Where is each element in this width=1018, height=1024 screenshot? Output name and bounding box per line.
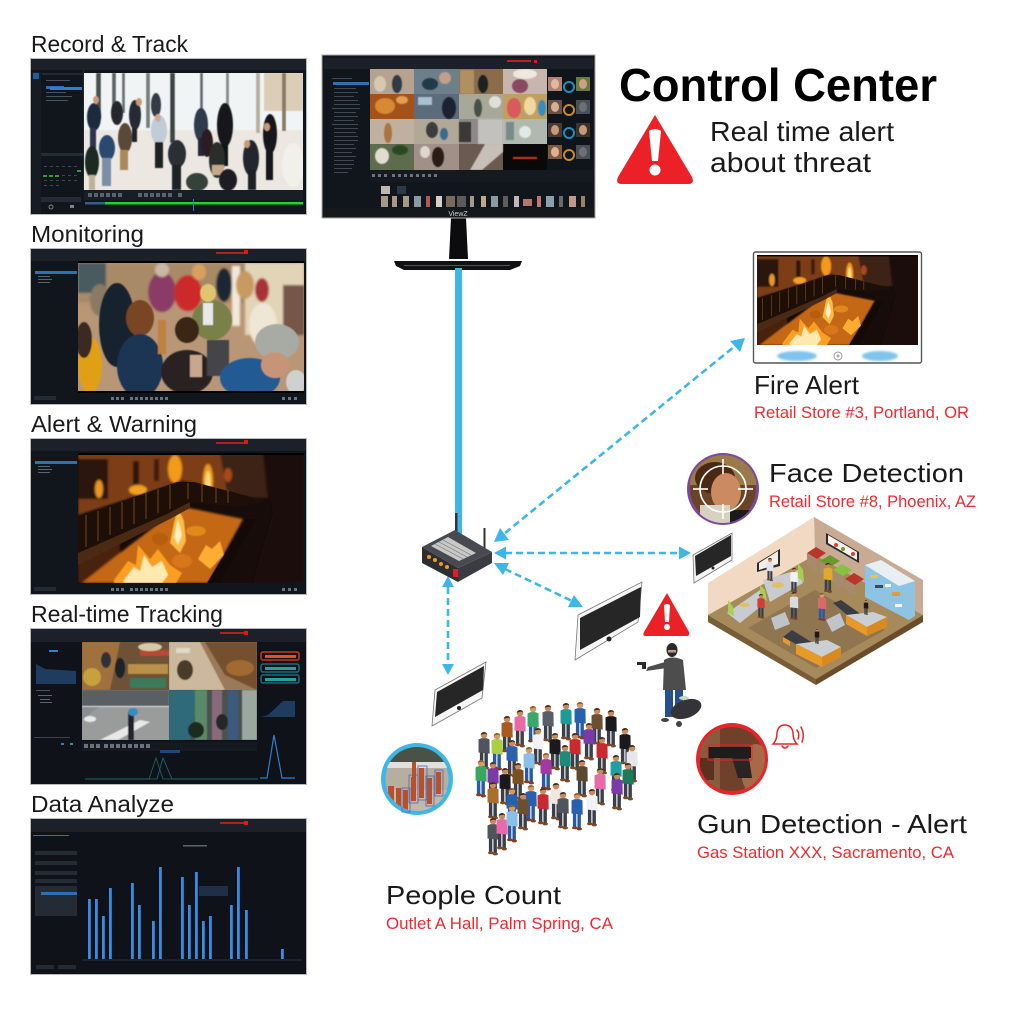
face detection label: Retail Store #8, Phoenix, AZ: [769, 493, 976, 511]
face detection label: Face Detection: [769, 458, 964, 488]
thumbnail strip: [381, 186, 585, 207]
alert description: Real time alert: [710, 116, 894, 147]
camera grid: [370, 69, 547, 170]
heading: real-time tracking: Real-time Tracking: [31, 601, 223, 627]
software window: bar chart report: [30, 818, 306, 974]
panel: monitoring: [30, 221, 306, 404]
tablet buttons: [777, 351, 898, 361]
connector: monitor to router: [455, 268, 462, 534]
masked robber with gun: [637, 643, 704, 727]
icon: alarm bell: [773, 725, 803, 748]
calendar grid: [44, 166, 77, 186]
refrigerated display: [865, 560, 915, 620]
gun detection label: [697, 809, 968, 862]
video: blurred shopping crowd: [76, 263, 306, 398]
right side gauges: [261, 652, 299, 683]
monitor stand: [394, 218, 522, 270]
panel: record and track: [30, 31, 306, 214]
crowd of people: [476, 702, 638, 855]
alert description: [710, 116, 894, 178]
people count label: [386, 880, 613, 933]
gun detection badge: [696, 723, 771, 796]
icon: router: [422, 513, 492, 582]
people count label: People Count: [386, 880, 562, 910]
four camera views: [82, 642, 257, 740]
panel: monitor with control center software: [322, 55, 595, 270]
fire alert label: [754, 370, 969, 422]
deli counters: [727, 590, 765, 623]
gun detection label: Gas Station XXX, Sacramento, CA: [697, 844, 954, 862]
face detection badge: [687, 453, 759, 525]
brand label: ViewZ: [448, 211, 468, 218]
video: building on fire: [78, 453, 304, 583]
bar chart: [88, 867, 284, 959]
fire alert label: Retail Store #3, Portland, OR: [754, 404, 969, 422]
arrow: router to people count: [442, 576, 454, 675]
face recognition cards: [547, 69, 593, 170]
software window: fire alert: [30, 438, 306, 594]
people count label: Outlet A Hall, Palm Spring, CA: [386, 915, 613, 933]
fire alert tablet: [754, 252, 922, 363]
title: Control Center: [619, 59, 937, 111]
software window: live view: [30, 248, 306, 404]
wall posters: [757, 549, 780, 572]
fire alert label: Fire Alert: [754, 370, 860, 400]
left area chart: [36, 664, 76, 684]
icon: alert triangle large: [617, 115, 693, 184]
heading: record and track: Record & Track: [31, 31, 188, 57]
gun detection label: Gun Detection - Alert: [697, 809, 968, 839]
shopping carts: [771, 612, 790, 630]
heading: alert and warning: Alert & Warning: [31, 411, 197, 437]
heading: monitoring: Monitoring: [31, 221, 144, 247]
right triangle chart: [260, 735, 295, 778]
arrow: router to fire alert: [494, 338, 745, 542]
gun detection tablet: [575, 582, 642, 660]
software window: playback: [30, 58, 306, 214]
isometric retail store: [708, 517, 923, 685]
people count badge: [381, 743, 453, 815]
bottom triangle chart: [85, 758, 258, 779]
icon: alert triangle small: [643, 593, 689, 636]
panel: data analyze: [30, 791, 306, 974]
video: crowd in glass lobby: [84, 73, 304, 191]
produce crates: [807, 547, 826, 559]
arrow: router to face detection: [494, 546, 691, 560]
shoppers: [757, 558, 868, 644]
timeline bar: [105, 202, 303, 204]
panel: alert and warning: [30, 411, 306, 594]
monitor frame: [322, 55, 595, 218]
people count camera tablet: [432, 662, 486, 726]
right area chart: [261, 701, 295, 717]
face detection camera tablet: [693, 533, 732, 583]
panel: real-time tracking: [30, 601, 306, 784]
arrow: router to gun detection: [494, 563, 583, 607]
checkout counters: [783, 600, 887, 667]
face detection label: [769, 458, 976, 511]
heading: data analyze: Data Analyze: [31, 791, 174, 817]
tablet screen: fire: [757, 255, 918, 345]
monitor screen: [324, 58, 593, 208]
software window: tracking dashboard: [30, 628, 306, 784]
alert description: about threat: [710, 147, 871, 178]
